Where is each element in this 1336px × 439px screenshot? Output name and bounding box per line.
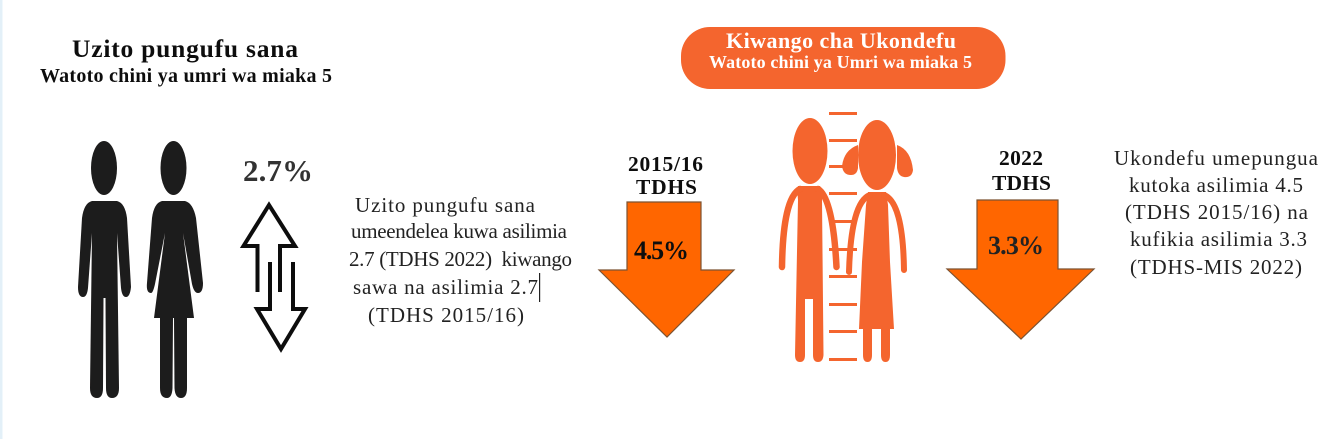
text: wasting description: kufikia asilimia 3.3 [1130, 227, 1307, 251]
label: 2022 TDHS [992, 146, 1051, 195]
text: wasting description: Ukondefu umepungua [1114, 146, 1319, 170]
heading: severe underweight: Uzito pungufu sana [72, 34, 298, 63]
arrow: 2022 value 3.3% [947, 200, 1094, 339]
text: severe underweight description [349, 193, 572, 327]
badge: wasting heading: Watoto chini ya Umri wa miaka 5 [709, 52, 972, 72]
label: 2022 TDHS: TDHS [992, 171, 1051, 195]
icon: boy silhouette [782, 118, 836, 362]
icon: up and down arrows [244, 205, 305, 349]
value: 2.7%: 2.7% [243, 153, 313, 188]
text: severe underweight description: Uzito pungufu sana [355, 193, 536, 217]
label: 2015/16 TDHS [628, 152, 703, 199]
icon: woman silhouette [147, 141, 203, 398]
arrow: 2022 value 3.3%: 3.3% [988, 231, 1044, 260]
label: 2022 TDHS: 2022 [999, 146, 1043, 170]
icon: girl silhouette [842, 120, 913, 362]
text: severe underweight description: 2.7 (TDHS 2022) kiwango [349, 247, 572, 271]
label: 2015/16 TDHS: TDHS [636, 175, 697, 199]
text: wasting description [1114, 146, 1319, 279]
text: severe underweight description: (TDHS 2015/16) [368, 303, 524, 327]
arrow: 2015/16 value 4.5%: 4.5% [634, 236, 689, 265]
icon: man silhouette [78, 141, 131, 398]
badge: wasting heading [681, 27, 1006, 89]
badge: wasting heading: Kiwango cha Ukondefu [726, 28, 956, 53]
text: wasting description: kutoka asilimia 4.5 [1129, 173, 1303, 197]
text: wasting description: (TDHS-MIS 2022) [1130, 255, 1302, 279]
text: severe underweight description: sawa na asilimia 2.7 [353, 275, 538, 299]
icon: height ruler [829, 112, 857, 361]
heading: severe underweight: Watoto chini ya umri wa miaka 5 [40, 65, 332, 87]
heading: severe underweight [40, 34, 332, 87]
text: severe underweight description: umeendelea kuwa asilimia [351, 219, 568, 243]
arrow: 2015/16 value 4.5% [599, 202, 734, 337]
text: wasting description: (TDHS 2015/16) na [1125, 200, 1309, 224]
label: 2015/16 TDHS: 2015/16 [628, 152, 703, 176]
